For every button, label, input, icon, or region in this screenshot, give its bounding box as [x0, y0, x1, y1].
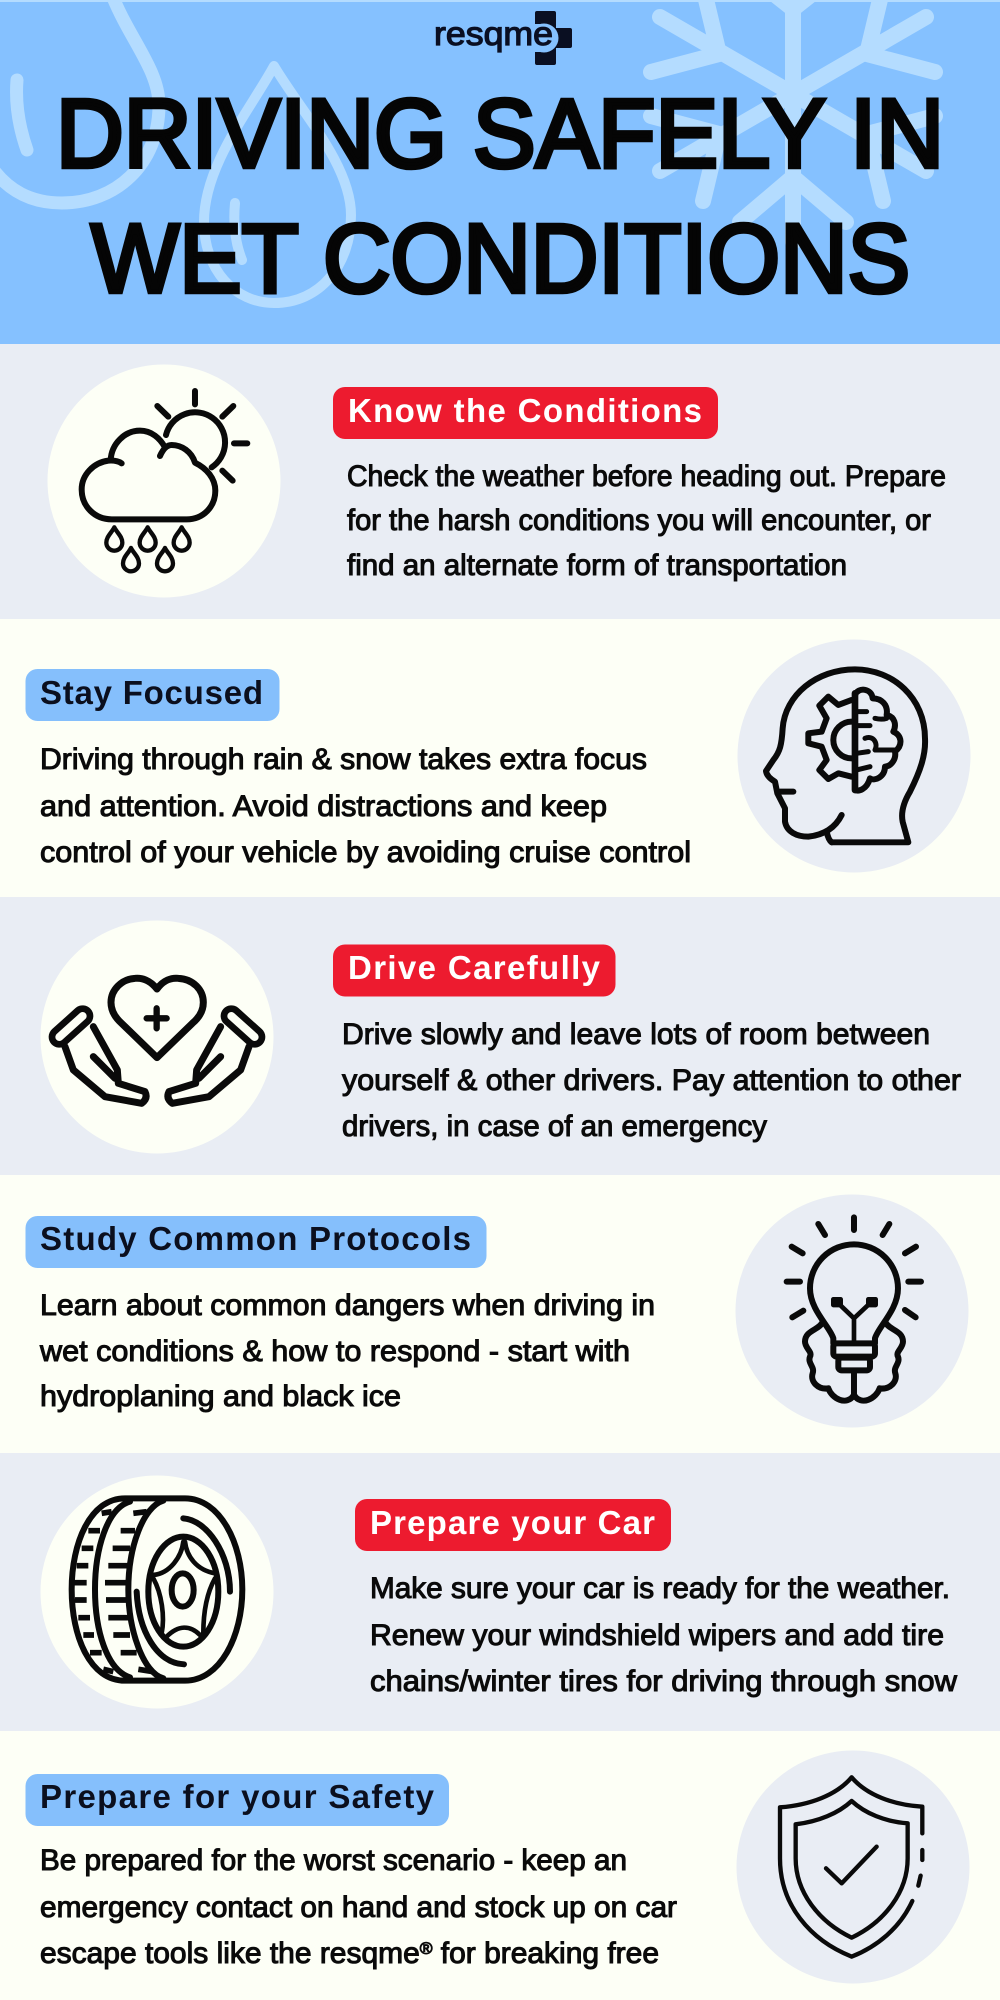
- heading: prepare for your safety: Prepare for your Safety: [40, 1778, 435, 1815]
- logo: resqme: [434, 11, 572, 65]
- text: stay focused: [40, 743, 691, 869]
- title: DRIVING SAFELY IN: [56, 79, 944, 188]
- icon: light bulb with brain: [736, 1194, 968, 1428]
- text: prepare for your safety: escape tools like the resqme: [40, 1937, 414, 1970]
- icon: tire: [40, 1476, 274, 1708]
- text: stay focused: Driving through rain & snow takes extra focus: [40, 743, 647, 776]
- heading: study common protocols: Study Common Protocols: [40, 1220, 471, 1257]
- heading: stay focused: [26, 669, 280, 721]
- heading: drive carefully: [333, 944, 616, 996]
- panel: prepare for your safety: [0, 1731, 1000, 2000]
- text: prepare your car: Renew your windshield wipers and add tire: [370, 1619, 944, 1652]
- text: know the conditions: for the harsh conditions you will encounter, or: [347, 504, 931, 537]
- heading: drive carefully: Drive Carefully: [348, 949, 601, 986]
- logo: resqme: resqme: [434, 15, 553, 52]
- text: drive carefully: [342, 1018, 961, 1143]
- heading: prepare your car: [355, 1499, 671, 1551]
- panel: know the conditions: [0, 344, 1000, 619]
- header panel: [0, 0, 1000, 344]
- text: stay focused: and attention. Avoid distractions and keep: [40, 790, 607, 823]
- text: know the conditions: Check the weather before heading out. Prepare: [347, 460, 946, 493]
- text: prepare your car: Make sure your car is ready for the weather.: [370, 1572, 950, 1605]
- title: WET CONDITIONS: [91, 204, 910, 313]
- heading: know the conditions: [333, 387, 718, 439]
- text: prepare for your safety: Be prepared for the worst scenario - keep an: [40, 1844, 627, 1877]
- panel: stay focused: [0, 619, 1000, 897]
- title: [56, 79, 944, 313]
- decoration: snowflake: [651, 0, 935, 242]
- heading: stay focused: Stay Focused: [40, 674, 263, 711]
- heading: know the conditions: Know the Conditions: [348, 392, 702, 429]
- heading: prepare for your safety: [26, 1774, 449, 1826]
- text: study common protocols: hydroplaning and black ice: [40, 1380, 401, 1413]
- panel: drive carefully: [0, 897, 1000, 1175]
- text: prepare for your safety: ®: [420, 1939, 433, 1958]
- text: prepare for your safety: for breaking free: [432, 1937, 659, 1970]
- text: drive carefully: yourself & other drivers. Pay attention to other: [342, 1064, 961, 1097]
- text: prepare for your safety: [40, 1844, 677, 1970]
- icon: rain cloud and sun: [48, 364, 280, 598]
- text: know the conditions: find an alternate form of transportation: [347, 549, 847, 582]
- text: stay focused: control of your vehicle by avoiding cruise control: [40, 836, 691, 869]
- icon: hands holding heart: [40, 920, 274, 1154]
- text: prepare your car: chains/winter tires for driving through snow: [370, 1665, 958, 1698]
- text: prepare your car: [370, 1572, 958, 1698]
- decoration: small water drop: [204, 66, 351, 303]
- text: prepare for your safety: emergency contact on hand and stock up on car: [40, 1891, 677, 1924]
- heading: prepare your car: Prepare your Car: [370, 1504, 655, 1541]
- decoration: large water drop: [0, 0, 159, 203]
- text: study common protocols: wet conditions & how to respond - start with: [39, 1335, 630, 1368]
- panel: prepare your car: [0, 1453, 1000, 1731]
- text: know the conditions: [347, 460, 946, 582]
- icon: head with gear and brain: [738, 640, 970, 872]
- icon: shield with check: [736, 1750, 970, 1984]
- heading: study common protocols: [26, 1216, 486, 1268]
- panel: study common protocols: [0, 1175, 1000, 1453]
- text: study common protocols: Learn about common dangers when driving in: [40, 1289, 655, 1322]
- text: drive carefully: drivers, in case of an emergency: [342, 1110, 767, 1143]
- text: study common protocols: [39, 1289, 655, 1413]
- text: drive carefully: Drive slowly and leave lots of room between: [342, 1018, 930, 1051]
